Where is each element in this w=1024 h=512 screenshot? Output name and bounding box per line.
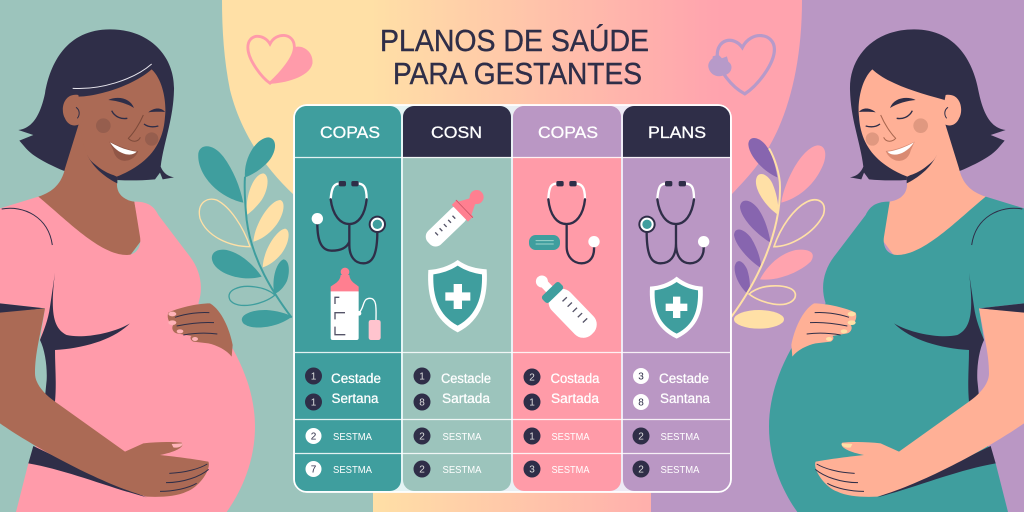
icon: baby bottle column 3 (528, 268, 602, 343)
icon: purple heart (708, 36, 774, 94)
right leaf sprig (731, 138, 825, 329)
column 2 sage: COSN (431, 123, 482, 142)
title: PARA GESTANTES (393, 56, 642, 91)
column 2 rows: 8 (419, 398, 425, 408)
teal dress (769, 197, 1024, 512)
column 4 rows: SESTMA (660, 432, 700, 443)
column 1 rows: Sertana (332, 391, 379, 406)
column 3 rows: 1 (529, 398, 535, 408)
column 3 rows: SESTMA (552, 432, 590, 443)
column 3 rows: 3 (529, 464, 535, 476)
central gradient shape (222, 0, 802, 512)
column 4 rows: Santana (660, 391, 710, 406)
left leaf sprig (198, 137, 292, 328)
neck and chest (38, 120, 142, 260)
upper hand (791, 303, 856, 357)
column 3 rows: Sartada (551, 391, 599, 406)
column 1 rows: 1 (311, 372, 317, 382)
icon: pink heart (248, 35, 313, 84)
column 2 rows (414, 368, 491, 478)
column 1 rows: Cestade (331, 371, 381, 386)
column 3 pink (513, 106, 621, 491)
background left (0, 0, 512, 512)
column 2 rows: Sartada (442, 391, 490, 406)
upper hand (168, 303, 233, 357)
column 4 purple: PLANS (648, 123, 706, 142)
column 1 rows: 2 (311, 432, 317, 442)
icon: shield column 4 (650, 277, 703, 339)
hair (18, 29, 174, 180)
column 4 rows: 2 (638, 432, 644, 442)
icon: stethoscope column 4 (638, 181, 709, 263)
arm and lower hand (815, 308, 1024, 497)
column 2 rows: 2 (419, 464, 425, 476)
column 2 rows: 2 (419, 432, 425, 442)
column 3 pink: COPAS (538, 123, 598, 142)
background right (512, 0, 1024, 512)
column 4 purple (623, 106, 730, 491)
column 4 rows: Cestade (659, 371, 709, 386)
dress shadows (894, 273, 984, 402)
column 1 rows: SESTMA (333, 432, 372, 443)
left pregnant woman (0, 29, 255, 512)
column 2 rows: SESTMA (442, 465, 482, 476)
column 2 sage (403, 106, 511, 491)
pink dress (0, 197, 255, 512)
icon: stethoscope column 1 (312, 181, 386, 263)
row dividers (295, 158, 730, 454)
title (380, 23, 649, 91)
arm and lower hand (0, 308, 209, 497)
table backing (294, 105, 731, 492)
hair (850, 29, 1006, 180)
column 3 rows: 1 (529, 432, 535, 442)
neck and chest (882, 120, 986, 260)
face (859, 69, 945, 177)
table border (294, 105, 731, 492)
column 4 rows: 2 (638, 464, 644, 476)
comparison table (294, 105, 731, 492)
icon: shield column 2 (428, 260, 487, 332)
column 3 rows: 2 (529, 372, 535, 384)
column 4 rows (632, 368, 710, 478)
icon: stethoscope column 3 (529, 181, 600, 263)
title: PLANOS DE SAÚDE (380, 23, 649, 58)
column 1 rows (305, 368, 381, 477)
column 1 teal: COPAS (320, 123, 380, 142)
column 2 rows: 1 (419, 372, 425, 382)
column 2 rows: Cestacle (441, 371, 491, 386)
column 4 rows: 8 (638, 398, 644, 408)
column 3 rows (524, 368, 600, 478)
dress shadows (40, 273, 130, 402)
column 1 rows: 7 (311, 464, 317, 476)
column 3 rows: SESTMA (552, 465, 590, 476)
right pregnant woman (769, 29, 1024, 512)
face (78, 69, 165, 177)
column 3 rows: Costada (550, 371, 600, 386)
icon: baby bottle column 1 (331, 268, 381, 340)
column 4 rows: SESTMA (660, 465, 700, 476)
column 1 rows: SESTMA (333, 465, 372, 476)
column 4 rows: 3 (638, 372, 644, 382)
icon: baby bottle column 2 (420, 183, 490, 252)
column 2 rows: SESTMA (442, 432, 482, 443)
column 1 teal (295, 106, 401, 491)
column 1 rows: 1 (311, 398, 317, 408)
